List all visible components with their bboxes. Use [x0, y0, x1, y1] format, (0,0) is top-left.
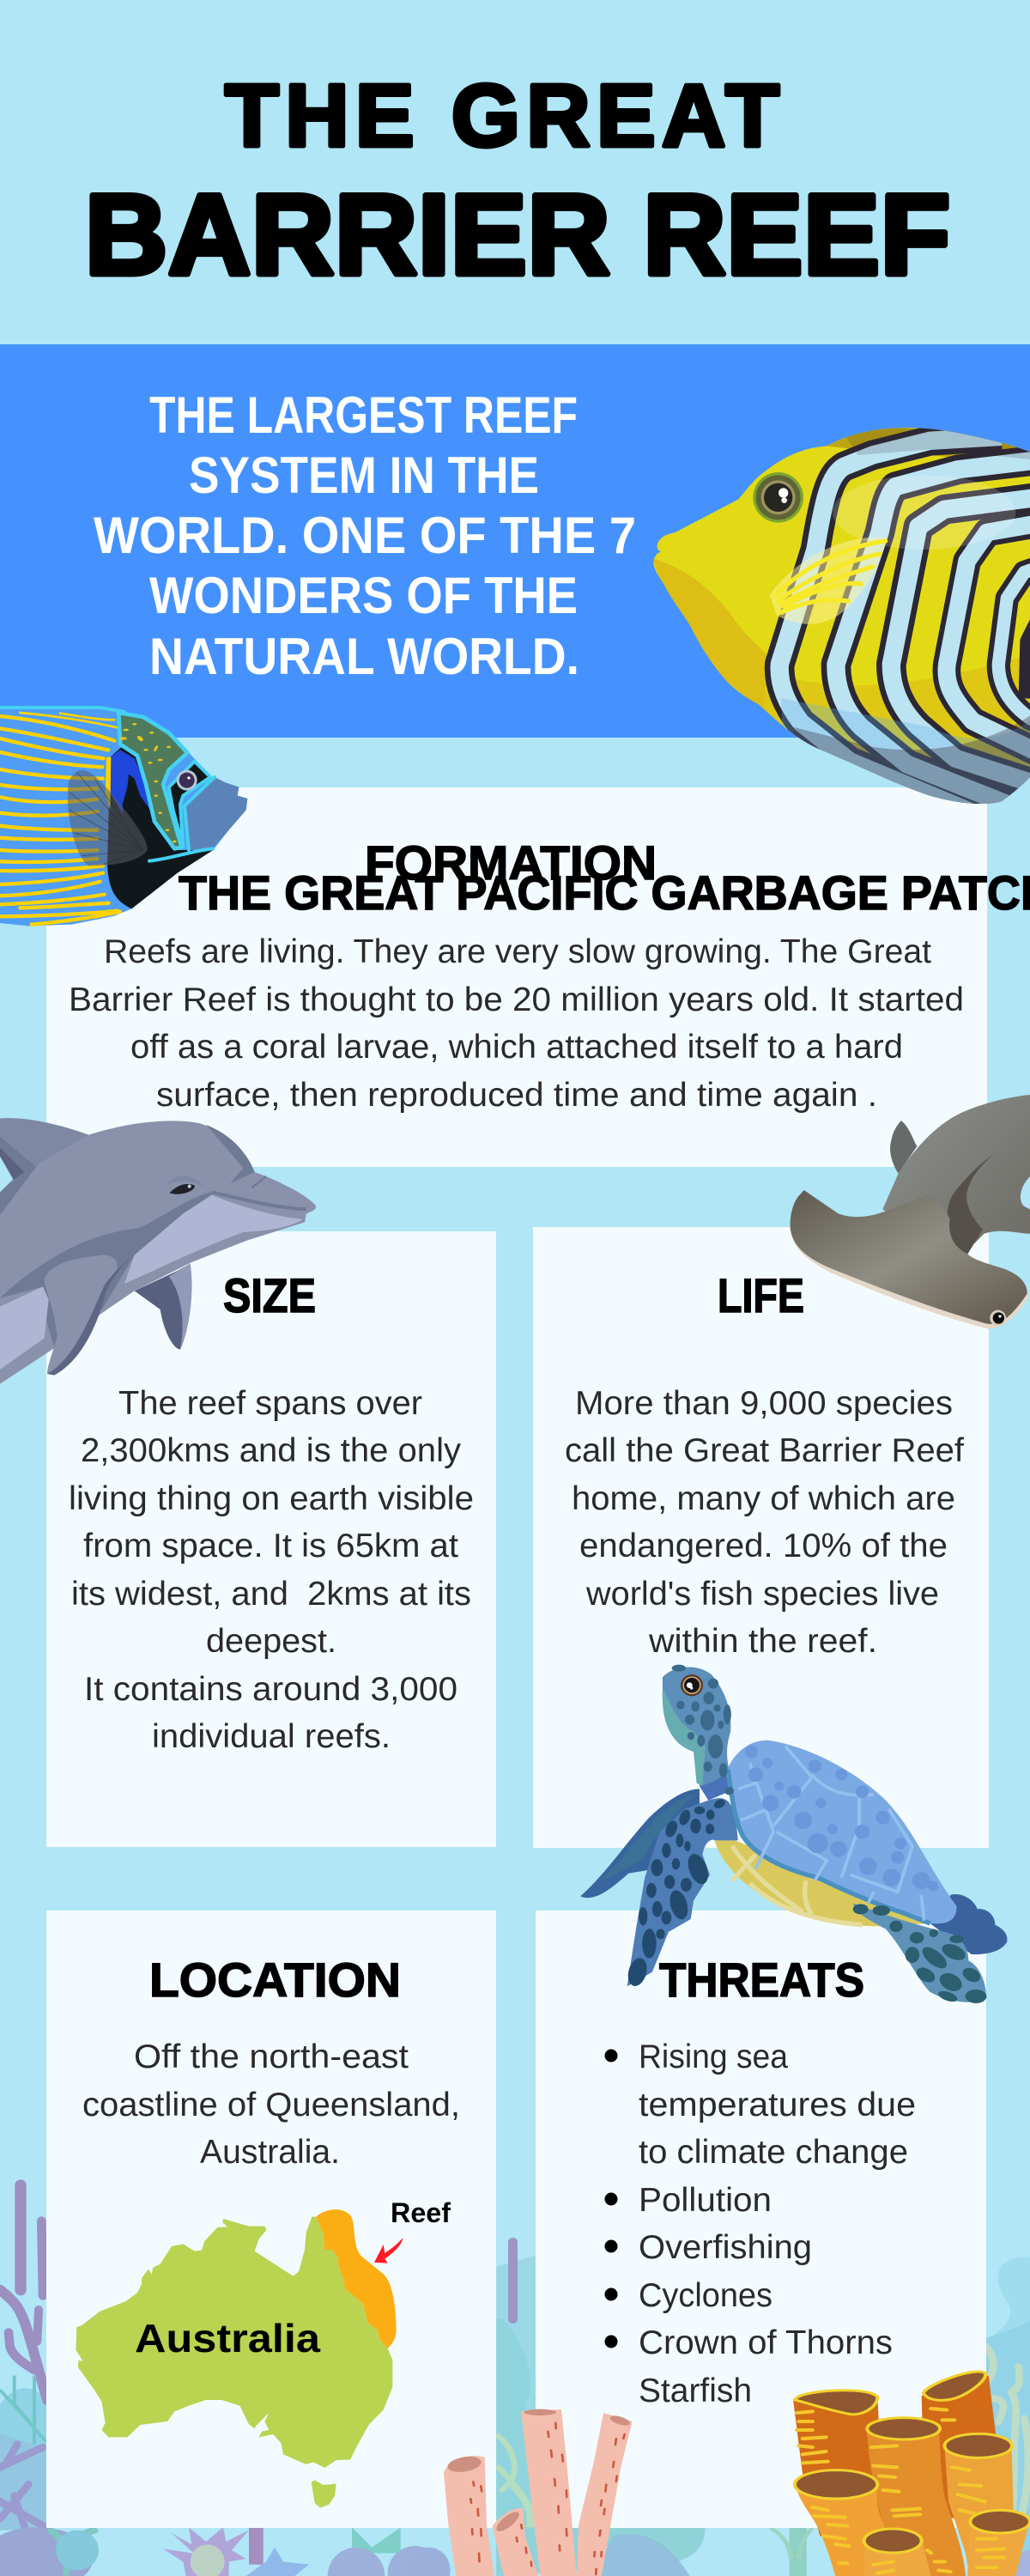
eye — [990, 1310, 1006, 1326]
panel: threats — [536, 1911, 986, 2528]
text: threats list: Rising sea — [639, 2038, 788, 2075]
text: size body: It contains around 3,000 — [84, 1671, 457, 1708]
text: life body: endangered. 10% of the — [579, 1528, 948, 1564]
text: life body: within the reef. — [648, 1623, 877, 1660]
icon: regal angelfish — [653, 428, 1030, 804]
eye — [681, 1674, 703, 1696]
text: threats list: Cyclones — [639, 2277, 772, 2314]
heading: formation: FORMATION — [365, 835, 657, 890]
icon: dolphin — [0, 1118, 316, 1384]
eye — [753, 472, 803, 523]
heading: location: LOCATION — [149, 1953, 401, 2007]
band text: NATURAL WORLD. — [149, 628, 579, 685]
text: threats list: Starfish — [639, 2372, 752, 2409]
band text: WORLD. ONE OF THE 7 — [94, 507, 636, 564]
heading: threats: THREATS — [659, 1953, 864, 2007]
text: life body: home, many of which are — [572, 1480, 955, 1517]
label: reef: Reef — [391, 2197, 451, 2228]
text: threats list: temperatures due — [639, 2087, 916, 2123]
text: location body: Australia. — [200, 2134, 340, 2171]
text: location body — [82, 2038, 460, 2171]
background coral: stem in gap — [508, 2238, 518, 2324]
text: life body: world's fish species live — [585, 1576, 939, 1613]
background coral: right side — [986, 2257, 1030, 2576]
text: size body: living thing on earth visible — [69, 1480, 474, 1517]
text: threats list: to climate change — [639, 2134, 908, 2171]
text: life body: call the Great Barrier Reef — [565, 1432, 964, 1469]
text: size body: from space. It is 65km at — [83, 1528, 458, 1564]
text: formation body: off as a coral larvae, which attached itself to a hard — [130, 1029, 903, 1066]
text: formation body — [69, 933, 964, 1114]
text: threats list: Overfishing — [639, 2229, 812, 2266]
text: threats list: Crown of Thorns — [639, 2324, 893, 2361]
map: australia — [76, 2197, 451, 2508]
title — [85, 66, 950, 299]
panel: formation — [46, 787, 987, 1167]
text: size body: The reef spans over — [118, 1385, 422, 1422]
text: size body: individual reefs. — [152, 1718, 391, 1755]
tasmania — [312, 2480, 336, 2508]
label: australia: Australia — [135, 2316, 320, 2360]
arrow — [374, 2238, 403, 2263]
panel: size — [46, 1231, 496, 1847]
text: threats list — [604, 2038, 916, 2409]
icon: pink tube coral — [444, 2409, 633, 2576]
title: THE GREAT — [225, 66, 779, 165]
text: size body: deepest. — [206, 1623, 336, 1660]
text: formation body: surface, then reproduced time and time again . — [156, 1077, 877, 1114]
text: size body: 2,300kms and is the only — [81, 1432, 462, 1469]
band text — [94, 386, 636, 685]
icon: emperor angelfish — [0, 708, 247, 926]
panel: location — [46, 1911, 496, 2528]
reef region — [316, 2209, 397, 2348]
text: size body: its widest, and 2kms at its — [71, 1576, 471, 1613]
background coral: gap and bottom right — [408, 2256, 1030, 2576]
text: location body: coastline of Queensland, — [82, 2087, 460, 2123]
pectoral fin — [770, 538, 887, 624]
band text: WONDERS OF THE — [149, 567, 578, 624]
text: formation body: Reefs are living. They are very slow growing. The Great — [104, 933, 931, 970]
title: BARRIER REEF — [85, 172, 950, 299]
mainland — [76, 2217, 392, 2468]
background coral: left and bottom — [0, 2185, 442, 2576]
text: threats list: Pollution — [639, 2182, 772, 2219]
text: formation body: Barrier Reef is thought to be 20 million years old. It started — [69, 981, 964, 1018]
heading: life: LIFE — [718, 1268, 804, 1322]
band text: SYSTEM IN THE — [189, 447, 539, 504]
panel: life — [533, 1227, 989, 1848]
blue band — [0, 344, 1030, 738]
heading: size: SIZE — [223, 1268, 316, 1322]
text: life body: More than 9,000 species — [575, 1385, 953, 1422]
eye — [166, 1176, 204, 1194]
band text: THE LARGEST REEF — [149, 386, 578, 444]
icon: hammerhead shark — [790, 1095, 1030, 1328]
text: location body: Off the north-east — [134, 2038, 409, 2075]
icon: orange tube coral — [793, 2372, 1030, 2576]
text: life body — [565, 1385, 964, 1660]
icon: sea turtle — [580, 1665, 1007, 2004]
text: size body — [69, 1385, 474, 1755]
